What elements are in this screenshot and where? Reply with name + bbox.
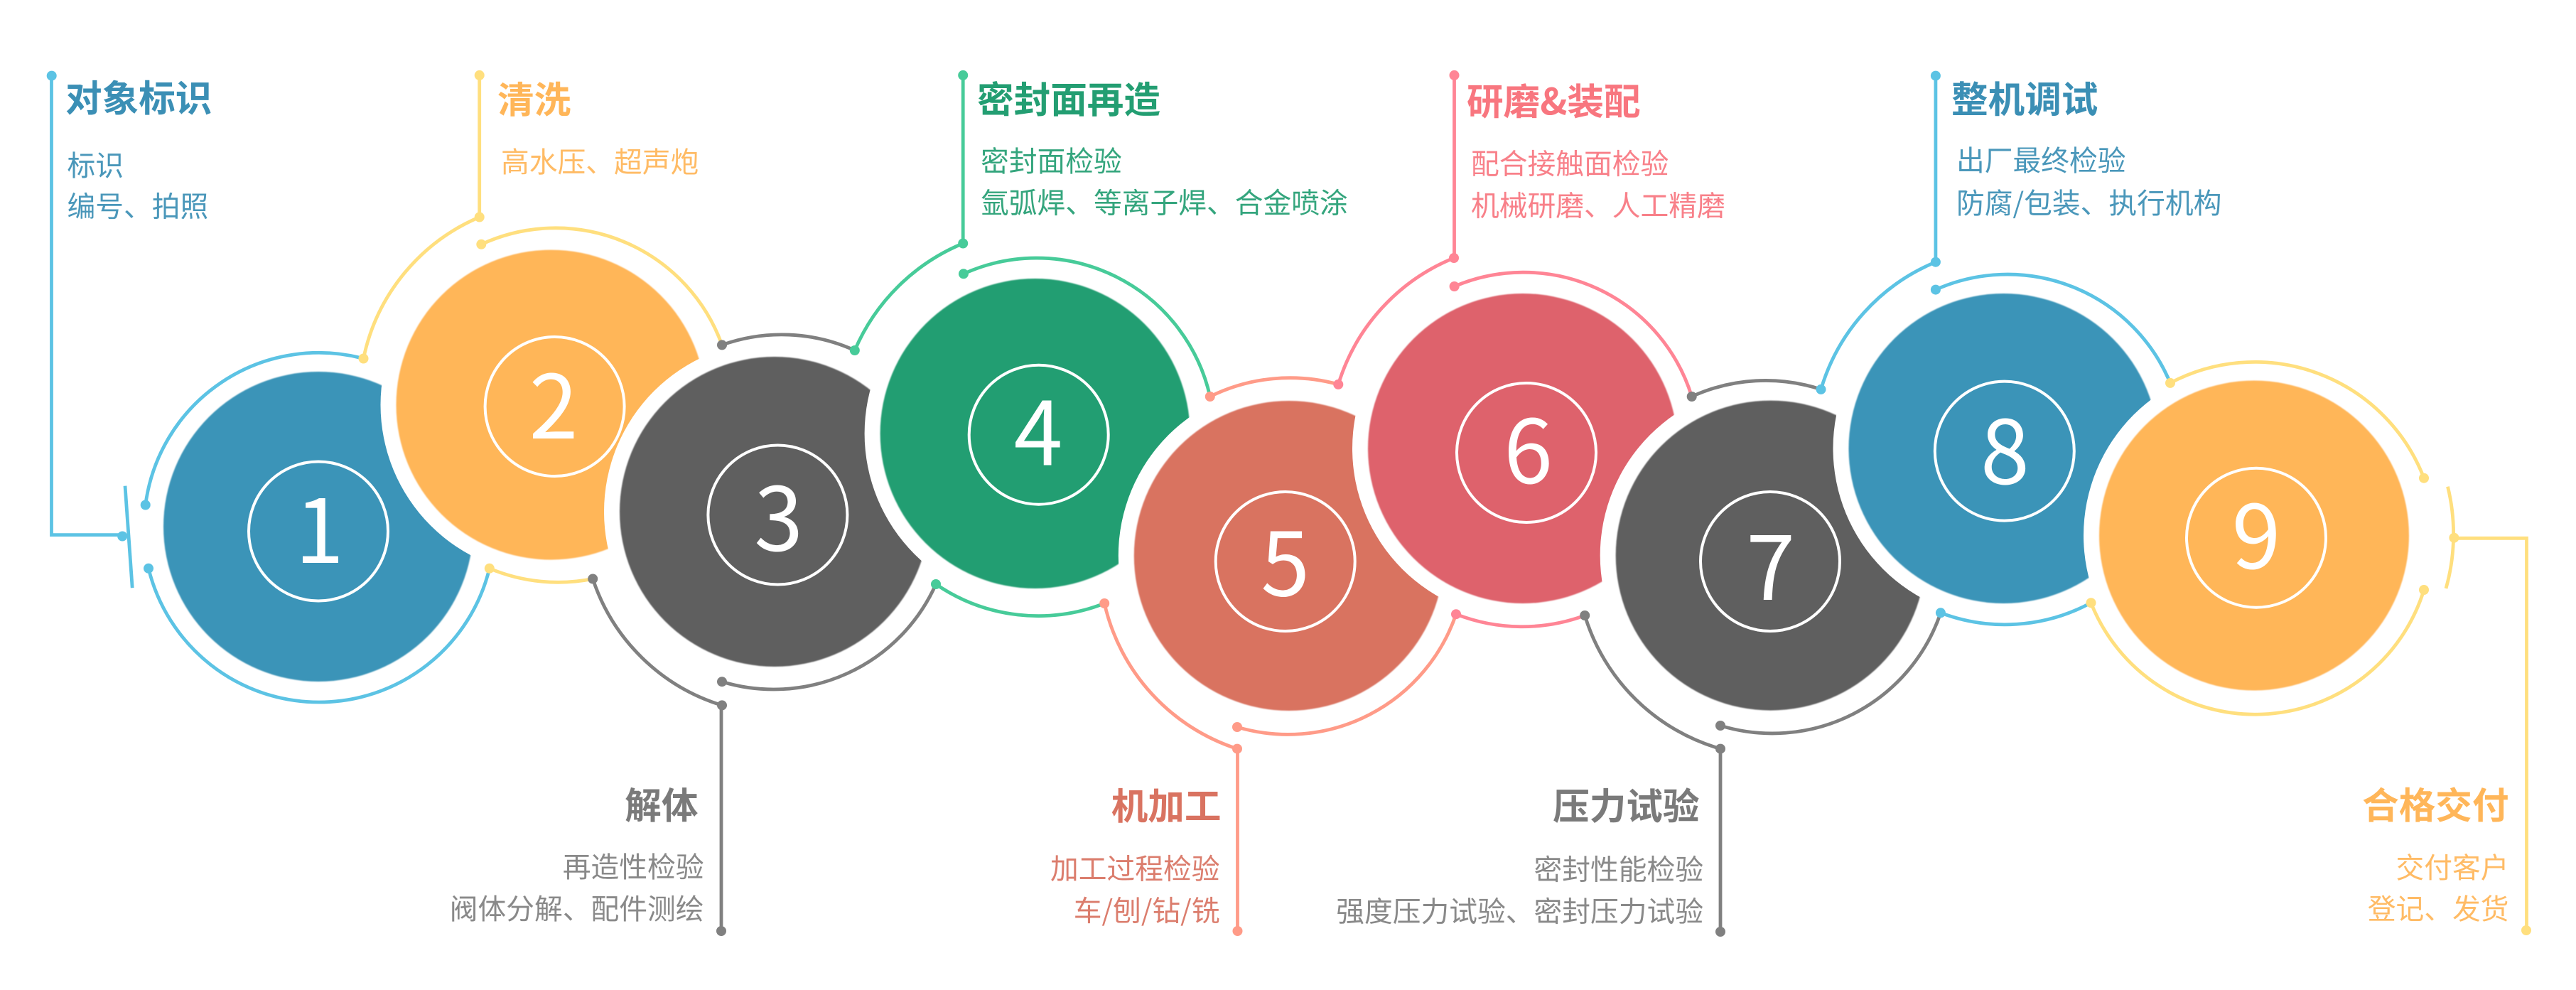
- step 5: 机加工: [1050, 378, 1460, 936]
- number badge 6: 6: [1504, 381, 1553, 509]
- number badge 8: 8: [1980, 382, 2030, 510]
- title 4: 密封面再造: [977, 70, 1160, 124]
- description 4: 氩弧焊、等离子焊、合金喷涂: [981, 181, 1348, 222]
- description 3: 再造性检验: [563, 845, 704, 886]
- description 5: 车/刨/钻/铣: [1074, 888, 1219, 930]
- description 1: 编号、拍照: [67, 185, 208, 225]
- number badge 3: 3: [754, 448, 803, 576]
- description 1: [67, 144, 208, 225]
- number badge 4: 4: [1014, 362, 1062, 490]
- description 3: 阀体分解、配件测绘: [450, 887, 704, 927]
- number badge 3: [708, 445, 847, 584]
- outline arcs and leader 7: [1580, 380, 1941, 937]
- number badge 5: [1216, 492, 1355, 631]
- description 6: 机械研磨、人工精磨: [1471, 183, 1725, 225]
- title 1: 对象标识: [65, 69, 212, 122]
- description 8: 防腐/包装、执行机构: [1956, 181, 2221, 222]
- title 8: 整机调试: [1951, 70, 2098, 124]
- outline arcs and leader 1: [47, 71, 490, 702]
- description 8: [1956, 139, 2221, 222]
- number badge 7: 7: [1746, 497, 1795, 625]
- title 3: 解体: [625, 776, 698, 829]
- description 5: [1050, 847, 1219, 930]
- step 2: 清洗: [358, 70, 722, 582]
- number badge 2: 2: [529, 336, 578, 464]
- title 5: 机加工: [1111, 777, 1221, 830]
- circle 7: [1600, 385, 1941, 726]
- circle 3: [604, 341, 945, 682]
- number badge 9: [2187, 466, 2326, 608]
- outline arcs and leader 6: [1333, 70, 1692, 627]
- circle 5: [1119, 385, 1460, 726]
- number badge 6: [1457, 381, 1596, 522]
- step 1: 对象标识: [47, 69, 490, 702]
- description 1: 标识: [67, 144, 124, 184]
- description 6: 配合接触面检验: [1471, 142, 1669, 182]
- description 7: 密封性能检验: [1534, 847, 1703, 888]
- title 2: 清洗: [497, 70, 571, 124]
- circle 6: [1352, 278, 1693, 619]
- description 7: 强度压力试验、密封压力试验: [1336, 890, 1703, 930]
- outline arcs and leader 3: [588, 335, 936, 936]
- description 2: 高水压、超声炮: [501, 140, 699, 181]
- description 9: [2368, 846, 2508, 927]
- outline arcs and leader 5: [1099, 378, 1456, 936]
- step 4: 密封面再造: [850, 70, 1348, 616]
- outline arcs and leader 9: [2086, 362, 2531, 935]
- description 4: [981, 139, 1348, 222]
- outline arcs and leader 2: [358, 70, 722, 582]
- circle 2: [381, 235, 722, 576]
- description 3: [450, 845, 704, 927]
- number badge 2: [485, 336, 625, 476]
- circle 4: [865, 263, 1206, 604]
- number badge 9: 9: [2232, 466, 2280, 594]
- circle 8: [1833, 278, 2174, 619]
- description 6: [1471, 142, 1725, 225]
- description 9: 交付客户: [2396, 846, 2508, 886]
- step 7: 压力试验: [1336, 380, 1941, 937]
- number badge 7: [1701, 492, 1840, 631]
- step 9: 合格交付: [2084, 362, 2531, 935]
- description 7: [1336, 847, 1703, 930]
- outline arcs and leader 8: [1816, 71, 2170, 625]
- description 8: 出厂最终检验: [1956, 139, 2126, 179]
- step 6: 研磨&装配: [1333, 70, 1725, 627]
- step 8: 整机调试: [1816, 70, 2221, 625]
- number badge 5: 5: [1261, 493, 1310, 621]
- description 9: 登记、发货: [2368, 887, 2508, 927]
- step 3: 解体: [450, 335, 945, 936]
- title 7: 压力试验: [1553, 777, 1700, 830]
- number badge 8: [1935, 382, 2074, 521]
- number badge 1: [249, 461, 388, 601]
- description 4: 密封面检验: [981, 139, 1122, 180]
- outline arcs and leader 4: [850, 70, 1210, 616]
- circle 1: [163, 372, 473, 682]
- title 9: 合格交付: [2362, 776, 2508, 829]
- circle 9: [2084, 365, 2425, 706]
- number badge 4: [969, 362, 1109, 505]
- description 5: 加工过程检验: [1050, 847, 1219, 887]
- number badge 1: 1: [295, 461, 344, 588]
- title 6: 研磨&装配: [1467, 72, 1641, 125]
